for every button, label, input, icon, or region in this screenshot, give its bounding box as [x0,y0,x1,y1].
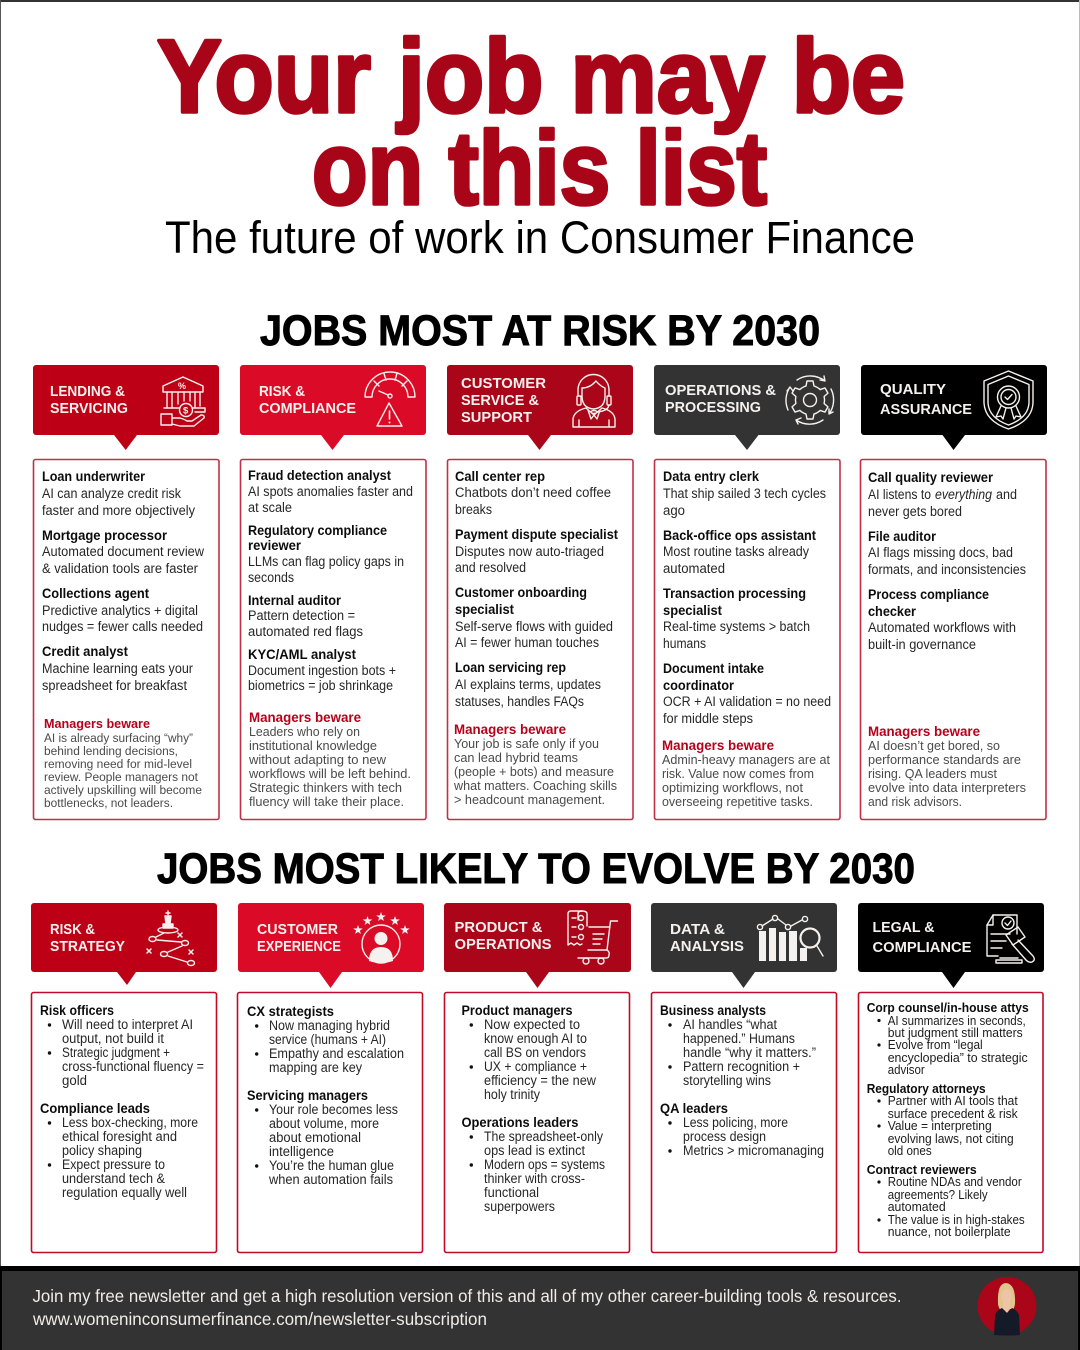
role: document intake coordinator: OCR + AI validation = no need [663,694,831,709]
role: risk officers: Strategic judgment + [62,1045,170,1060]
role: call center rep: Call center rep [455,469,545,484]
role: servicing managers: You’re the human glue [269,1158,394,1173]
role: regulatory attorneys: surface precedent & risk [888,1106,1018,1121]
callout: managers beware: actively upskilling will become [44,783,202,797]
callout: managers beware: AI is already surfacing “why” [44,731,193,745]
role: business analysts [660,1003,816,1088]
header: operations and processing [654,365,840,450]
icon: bank with coin: $ [183,406,189,416]
role: KYC/AML analyst: biometrics = job shrinkage [248,678,393,693]
header: legal and compliance: COMPLIANCE [872,940,972,956]
icon: chess strategy plan [147,911,194,966]
role: operations leaders: functional [484,1185,539,1200]
role: internal auditor: Pattern detection = [248,608,355,623]
role: corporate counsel [867,1000,1029,1077]
role: payment dispute specialist: and resolved [455,560,526,575]
role: CX strategists: Now managing hybrid [269,1018,390,1033]
header: customer experience [238,903,424,988]
role: customer onboarding specialist: specialist [455,602,514,617]
icon: shield with badge [984,371,1033,429]
role: regulatory compliance reviewer [248,523,404,585]
role: regulatory attorneys: Value = interpreting [888,1118,992,1133]
role: servicing managers: about volume, more [269,1116,379,1131]
role: operations leaders [462,1115,605,1214]
role: transaction processing specialist [663,586,810,651]
role: corporate counsel: but judgment still matters [888,1025,1023,1040]
role: collections agent: Collections agent [42,586,149,601]
role: call center rep: Chatbots don’t need coffee [455,485,611,500]
role: credit analyst: Machine learning eats your [42,661,193,676]
role: data entry clerk [663,469,826,518]
panel: product and operations jobs [444,992,630,1252]
role: KYC/AML analyst: Document ingestion bots + [248,663,396,678]
role: loan underwriter: AI can analyze credit risk [42,486,181,501]
panel: data and analysis jobs [652,992,836,1252]
section heading: jobs most likely to evolve: JOBS MOST LIKELY TO EVOLVE BY 2030 [157,845,915,893]
role: corporate counsel: encyclopedia” to strategic [888,1050,1028,1065]
role: back-office ops assistant: Most routine tasks already [663,544,809,559]
role: corporate counsel: Corp counsel/in-house attys [867,1000,1029,1015]
role: compliance leads [40,1101,198,1200]
callout: managers beware [248,710,411,809]
role: compliance leads: understand tech & [62,1171,165,1186]
role: contract reviewers: nuance, not boilerplate [888,1224,1011,1239]
role: loan underwriter [42,469,195,518]
role: back-office ops assistant [663,528,816,576]
panel: quality assurance jobs [860,460,1046,820]
role: contract reviewers [867,1162,1025,1239]
newsletter text: www.womeninconsumerfinance.com/newsletter-subscription [32,1309,487,1329]
role: customer onboarding specialist: Self-serve flows with guided [455,619,613,634]
role: compliance leads: Expect pressure to [62,1157,165,1172]
callout: managers beware: overseeing repetitive tasks. [662,794,813,809]
header: risk and strategy: STRATEGY [50,939,125,955]
role: collections agent: Predictive analytics + digital [42,603,198,618]
role: QA leaders [660,1101,824,1158]
role: operations leaders: Operations leaders [462,1115,578,1130]
header: risk and compliance: COMPLIANCE [259,401,356,417]
role: call quality reviewer: AI listens to [868,487,931,502]
header: operations and processing: OPERATIONS & [665,383,777,399]
role: operations leaders: ops lead is extinct [484,1143,585,1158]
role: product managers [462,1003,596,1102]
role: contract reviewers: The value is in high-stakes [888,1212,1025,1227]
icon: customer with stars [353,912,410,963]
role: product managers: efficiency = the new [484,1073,596,1088]
role: regulatory compliance reviewer: seconds [248,570,294,585]
icon: gauge and warning [365,372,415,426]
header: data and analysis: DATA & [670,922,726,938]
role: compliance leads: regulation equally well [62,1185,187,1200]
header: quality assurance: QUALITY [880,382,946,398]
callout: managers beware: rising. QA leaders must [868,766,997,781]
role: servicing managers: when automation fails [268,1172,393,1187]
footer banner [0,1266,1080,1350]
callout: managers beware: what matters. Coaching skills [453,778,617,793]
callout: managers beware: risk. Value now comes from [662,766,814,781]
role: servicing managers [247,1088,398,1187]
callout: managers beware: removing need for mid-level [44,757,192,771]
panel: legal and compliance jobs [858,992,1043,1252]
role: document intake coordinator: coordinator [663,678,735,693]
role: document intake coordinator [663,661,831,726]
role: operations leaders: The spreadsheet-only [484,1129,603,1144]
header: legal and compliance [858,903,1044,988]
callout: managers beware [44,717,202,810]
role: compliance leads: Compliance leads [40,1101,150,1116]
role: transaction processing specialist: humans [663,636,706,651]
header: quality assurance: ASSURANCE [880,402,972,418]
role: process compliance checker: checker [868,604,917,619]
role: compliance leads: ethical foresight and [62,1129,177,1144]
title: Your job may be [157,19,905,135]
role: payment dispute specialist: Disputes now auto-triaged [455,544,604,559]
panel: customer experience jobs [238,992,422,1252]
role: CX strategists: CX strategists [247,1004,334,1019]
role: process compliance checker: Automated workflows with [868,620,1016,635]
role: regulatory attorneys: Partner with AI tools that [888,1093,1018,1108]
callout: managers beware: (people + bots) and measure [454,764,614,779]
subtitle: The future of work in Consumer Finance [165,212,915,263]
role: credit analyst: Credit analyst [42,644,128,659]
role: business analysts: Business analysts [660,1003,766,1018]
role: internal auditor: Internal auditor [248,593,342,608]
callout: managers beware: review. People managers not [44,770,199,784]
role: regulatory compliance reviewer: reviewer [248,538,302,553]
role: customer onboarding specialist: Customer onboarding [455,585,587,600]
header: customer service and support: CUSTOMER [461,376,547,392]
role: CX strategists: service (humans + AI) [269,1032,386,1047]
header: product and operations: PRODUCT & [454,920,543,936]
role: mortgage processor: & validation tools are faster [42,561,198,576]
callout: managers beware: AI doesn’t get bored, so [868,738,1000,753]
role: corporate counsel: Evolve from “legal [888,1037,983,1052]
role: call quality reviewer: and [996,487,1017,502]
header: data and analysis: ANALYSIS [670,939,744,955]
role: file auditor: File auditor [868,529,937,544]
callout: managers beware: evolve into data interpreters [868,780,1026,795]
panel: risk and strategy jobs [32,992,216,1252]
header: customer service and support: SERVICE & [461,393,540,409]
role: business analysts: storytelling wins [683,1073,771,1088]
callout: managers beware: behind lending decisions, [44,744,178,758]
header: customer service and support: SUPPORT [461,410,532,426]
panel: customer service jobs [448,460,633,820]
role: contract reviewers: Routine NDAs and vendor [888,1174,1022,1189]
role: file auditor: formats, and inconsistencies [868,562,1026,577]
icon: gear with arrows [786,376,834,424]
role: regulatory attorneys: old ones [888,1143,932,1158]
role: servicing managers: Your role becomes less [269,1102,398,1117]
header: customer experience: CUSTOMER [257,922,339,938]
callout: managers beware: workflows will be left behind. [248,766,411,781]
role: regulatory attorneys: Regulatory attorneys [867,1081,986,1096]
role: fraud detection analyst: AI spots anomalies faster and [248,484,413,499]
icon: bank with coin [161,377,205,426]
role: CX strategists [247,1004,404,1075]
callout: managers beware: institutional knowledge [249,738,377,753]
role: QA leaders: Metrics > micromanaging [683,1143,824,1158]
role: internal auditor: automated red flags [248,624,363,639]
icon: receipt and cart [568,911,618,964]
callout: managers beware: performance standards are [868,752,1021,767]
role: QA leaders: QA leaders [660,1101,728,1116]
callout: managers beware: Your job is safe only if you [454,736,599,751]
role: business analysts: happened.” Humans [683,1031,795,1046]
callout: managers beware: Strategic thinkers with tech [249,780,402,795]
role: CX strategists: Empathy and escalation [269,1046,404,1061]
role: process compliance checker: Process compliance [868,587,989,602]
callout: managers beware: > headcount management. [454,792,605,807]
portrait [978,1277,1036,1336]
header: risk and compliance [240,365,426,450]
role: risk officers: Will need to interpret AI [62,1017,193,1032]
role: product managers: UX + compliance + [484,1059,587,1074]
role: credit analyst: spreadsheet for breakfast [42,678,187,693]
role: customer onboarding specialist: AI = fewer human touches [455,635,599,650]
role: operations leaders: superpowers [484,1199,555,1214]
panel: lending and servicing jobs [34,460,219,820]
role: product managers: Product managers [462,1003,572,1018]
role: product managers: holy trinity [484,1087,540,1102]
header: lending and servicing: LENDING & [50,384,125,400]
role: loan servicing rep: Loan servicing rep [455,660,566,675]
role: risk officers: output, not build it [62,1031,164,1046]
callout: managers beware: without adapting to new [248,752,387,767]
header: lending and servicing: SERVICING [50,401,128,417]
role: contract reviewers: Contract reviewers [867,1162,977,1177]
callout: managers beware: optimizing workflows, not [662,780,803,795]
icon: document and gavel [987,915,1034,963]
callout: managers beware: Managers beware [662,738,774,753]
role: KYC/AML analyst [248,647,396,693]
callout: managers beware: Managers beware [454,722,566,737]
role: fraud detection analyst [248,468,413,515]
icon: headset agent [573,374,615,427]
callout: managers beware: Admin-heavy managers are at [662,752,830,767]
header: risk and compliance: RISK & [259,384,305,400]
newsletter text: Join my free newsletter and get a high resolution version of this and all of my other career-building tools & resources. [32,1286,902,1306]
role: collections agent [42,586,203,634]
role: product managers: call BS on vendors [484,1045,586,1060]
role: call quality reviewer: Call quality reviewer [868,470,994,485]
panel: risk and compliance jobs [240,460,426,820]
header: legal and compliance: LEGAL & [872,920,935,936]
icon: bank with coin: % [178,381,186,391]
role: compliance leads: policy shaping [62,1143,142,1158]
role: loan underwriter: faster and more objectively [42,503,195,518]
role: back-office ops assistant: Back-office ops assistant [663,528,816,543]
callout: managers beware: Managers beware [249,710,361,725]
callout: managers beware [662,738,830,809]
role: risk officers: gold [62,1073,87,1088]
role: regulatory compliance reviewer: Regulatory compliance [248,523,387,538]
header: quality assurance [861,365,1047,450]
callout: managers beware: Leaders who rely on [249,724,360,739]
role: QA leaders: process design [683,1129,766,1144]
newsletter text [32,1286,901,1329]
role: product managers: know enough AI to [484,1031,587,1046]
header: risk and strategy [31,903,217,985]
role: transaction processing specialist: Transaction processing [663,586,806,601]
callout: managers beware: Managers beware [44,717,150,731]
role: process compliance checker: built-in governance [868,637,976,652]
role: fraud detection analyst: Fraud detection analyst [248,468,391,483]
role: internal auditor [248,593,363,639]
role: call quality reviewer: everything [935,487,992,502]
icon: bar chart with magnifier [757,915,823,961]
callout: managers beware: fluency will take their place. [249,794,404,809]
role: loan servicing rep: AI explains terms, updates [455,677,601,692]
role: customer onboarding specialist [455,585,613,650]
role: operations leaders: thinker with cross- [484,1171,585,1186]
role: call center rep [455,469,611,517]
title [157,19,905,227]
role: call center rep: breaks [455,502,492,517]
callout: managers beware [868,724,1026,809]
role: mortgage processor [42,528,204,576]
role: corporate counsel: advisor [888,1062,925,1077]
role: QA leaders: Less policing, more [683,1115,788,1130]
header: operations and processing: PROCESSING [665,400,761,416]
role: corporate counsel: AI summarizes in seconds, [888,1013,1026,1028]
role: servicing managers: Servicing managers [247,1088,368,1103]
role: document intake coordinator: Document intake [663,661,764,676]
role: call quality reviewer [868,470,1017,519]
header: lending and servicing [33,365,219,450]
role: business analysts: Pattern recognition + [683,1059,800,1074]
title: on this list [312,111,767,227]
role: business analysts: AI handles “what [683,1017,777,1032]
role: compliance leads: Less box-checking, more [62,1115,198,1130]
role: file auditor [868,529,1026,577]
role: document intake coordinator: for middle steps [663,711,753,726]
role: loan underwriter: Loan underwriter [42,469,146,484]
header: risk and strategy: RISK & [50,922,95,938]
role: CX strategists: mapping are key [269,1060,362,1075]
role: product managers: Now expected to [484,1017,580,1032]
role: regulatory compliance reviewer: LLMs can flag policy gaps in [248,554,404,569]
role: regulatory attorneys [867,1081,1018,1158]
callout: managers beware [453,722,617,807]
header: customer experience: EXPERIENCE [257,939,341,955]
role: risk officers: Risk officers [40,1003,114,1018]
role: risk officers: cross-functional fluency = [62,1059,204,1074]
role: business analysts: handle “why it matters.” [683,1045,816,1060]
role: payment dispute specialist [455,527,618,575]
role: contract reviewers: agreements? Likely [888,1187,988,1202]
callout: managers beware: bottlenecks, not leaders. [44,796,173,810]
role: mortgage processor: Automated document review [42,544,204,559]
role: servicing managers: intelligence [269,1144,334,1159]
role: collections agent: nudges = fewer calls needed [42,619,203,634]
role: loan servicing rep: statuses, handles FAQs [455,694,584,709]
section heading: jobs most at risk: JOBS MOST AT RISK BY 2030 [260,307,820,355]
role: transaction processing specialist: specialist [663,603,722,618]
role: loan servicing rep [455,660,601,709]
callout: managers beware: Managers beware [868,724,980,739]
panel: operations and processing jobs [654,460,840,820]
role: contract reviewers: automated [888,1199,946,1214]
callout: managers beware: can lead hybrid teams [454,750,578,765]
header: product and operations [444,903,631,988]
role: fraud detection analyst: at scale [248,500,292,515]
role: file auditor: AI flags missing docs, bad [868,545,1013,560]
role: data entry clerk: ago [663,503,685,518]
role: data entry clerk: That ship sailed 3 tech cycles [663,486,826,501]
role: risk officers [40,1003,204,1088]
role: back-office ops assistant: automated [663,561,725,576]
callout: managers beware: and risk advisors. [868,794,962,809]
role: call quality reviewer: never gets bored [868,504,962,519]
header: customer service and support [447,365,633,450]
role: transaction processing specialist: Real-time systems > batch [663,619,810,634]
role: KYC/AML analyst: KYC/AML analyst [248,647,356,662]
role: data entry clerk: Data entry clerk [663,469,759,484]
header: product and operations: OPERATIONS [454,937,552,953]
header: data and analysis [651,903,837,988]
role: credit analyst [42,644,193,693]
role: payment dispute specialist: Payment dispute specialist [455,527,618,542]
role: regulatory attorneys: evolving laws, not citing [888,1131,1014,1146]
role: servicing managers: about emotional [269,1130,361,1145]
role: mortgage processor: Mortgage processor [42,528,168,543]
role: operations leaders: Modern ops = systems [484,1157,605,1172]
role: process compliance checker [868,587,1016,652]
